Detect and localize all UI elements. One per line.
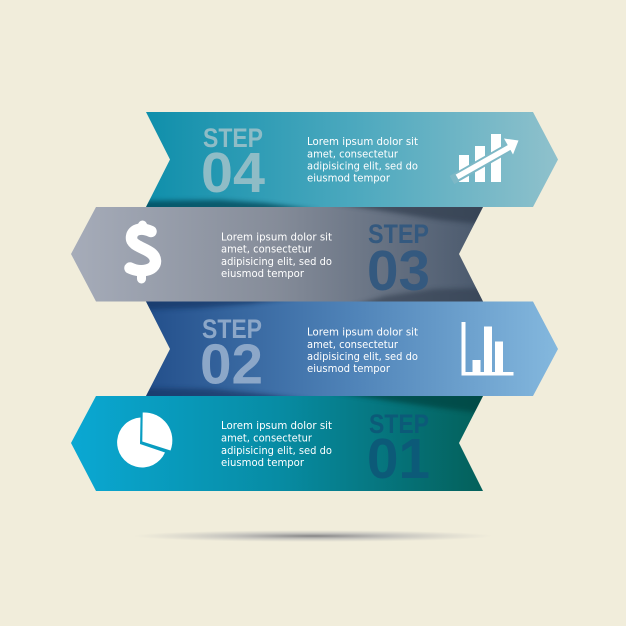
step 02 number: 02 xyxy=(200,332,263,396)
panel: step 03 xyxy=(71,203,490,306)
icon: pie chart xyxy=(117,412,172,467)
step 03 text: adipisicing elit, sed do xyxy=(221,256,332,268)
step 04 text: Lorem ipsum dolor sit xyxy=(307,136,418,148)
icon: dollar sign xyxy=(130,225,156,279)
floor shadow xyxy=(133,530,493,542)
step 03 text: Lorem ipsum dolor sit xyxy=(221,232,332,244)
icon: bar chart xyxy=(462,322,514,376)
step 03 heading: STEP xyxy=(368,219,429,249)
step 01 heading: STEP xyxy=(369,409,429,439)
step 04 text: eiusmod tempor xyxy=(307,172,391,184)
step 03 text xyxy=(221,232,332,280)
step 02 text: amet, consectetur xyxy=(307,339,399,351)
step 02 text: adipisicing elit, sed do xyxy=(307,351,418,363)
panel: step 01 xyxy=(71,392,490,491)
step 01 text: Lorem ipsum dolor sit xyxy=(221,420,332,432)
step 04 text xyxy=(307,136,418,184)
step 01 text: eiusmod tempor xyxy=(221,457,305,469)
step 04 heading: STEP xyxy=(203,123,263,153)
step 04 text: amet, consectetur xyxy=(307,148,399,160)
step 01 text: amet, consectetur xyxy=(221,432,313,444)
step 03 number: 03 xyxy=(367,239,430,303)
step 03 text: eiusmod tempor xyxy=(221,268,305,280)
step 02 text: eiusmod tempor xyxy=(307,363,391,375)
step 01 text: adipisicing elit, sed do xyxy=(221,445,332,457)
step 02 text xyxy=(307,326,418,375)
step 01 text xyxy=(221,420,332,469)
step 04 text: adipisicing elit, sed do xyxy=(307,160,418,172)
step 03 text: amet, consectetur xyxy=(221,244,313,256)
panel: step 04 xyxy=(130,112,558,212)
step 01 number: 01 xyxy=(367,427,430,491)
step 02 text: Lorem ipsum dolor sit xyxy=(307,326,418,338)
panel: step 02 xyxy=(146,302,558,396)
step 04 number: 04 xyxy=(201,141,265,205)
step 02 heading: STEP xyxy=(202,314,262,344)
icon: rising bars with arrow xyxy=(452,134,518,182)
